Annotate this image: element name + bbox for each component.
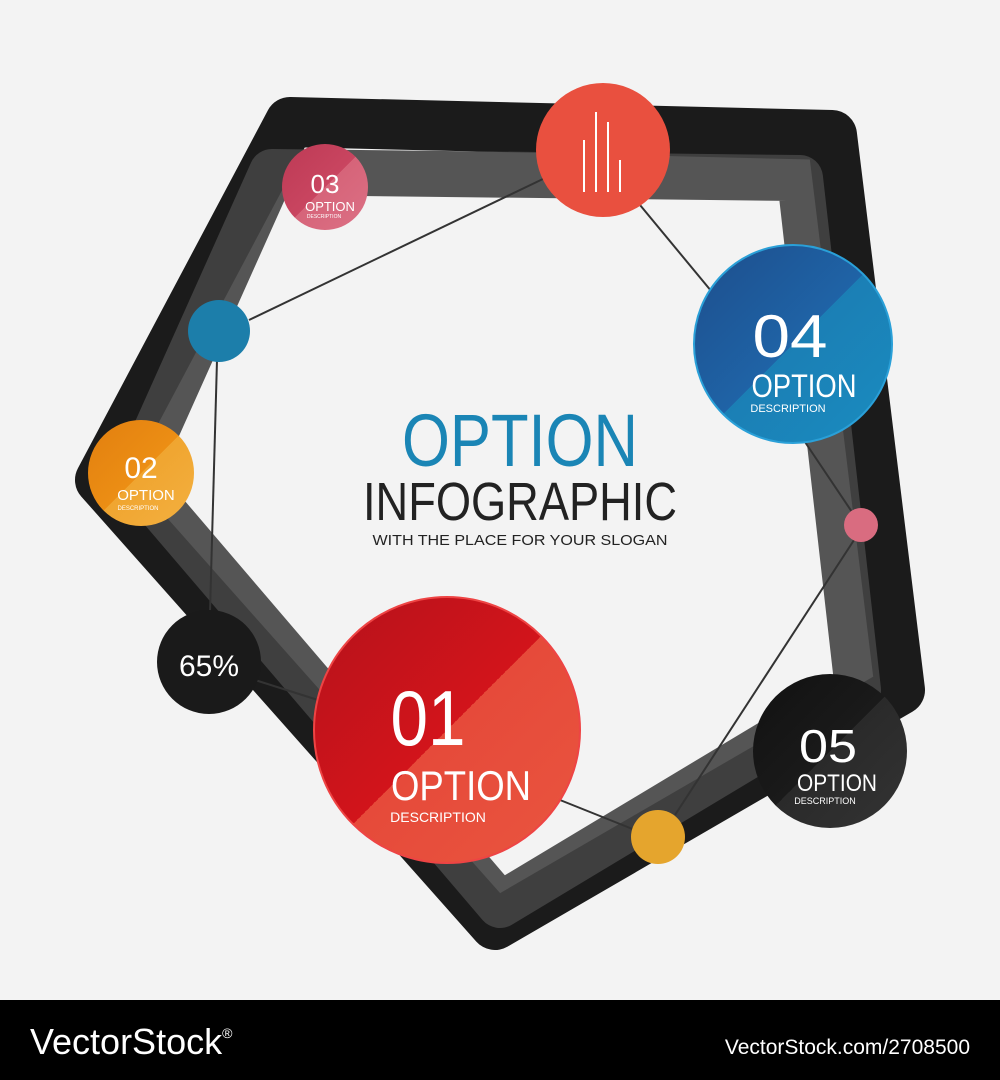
title: INFOGRAPHIC <box>363 472 677 532</box>
65% circle <box>157 610 261 714</box>
small pink dot <box>844 508 878 542</box>
option 05: 05 <box>799 720 857 772</box>
option 02: OPTION <box>117 487 175 504</box>
icon circle: chart top <box>536 83 670 217</box>
option 04: DESCRIPTION <box>750 403 826 415</box>
footer bar: VectorStock.com/2708500 <box>725 1036 970 1059</box>
option 04 <box>694 245 892 443</box>
option 01: DESCRIPTION <box>390 809 486 825</box>
option 03: DESCRIPTION <box>307 214 341 220</box>
small blue dot <box>188 300 250 362</box>
footer bar <box>0 1000 1000 1080</box>
connector lines <box>210 178 856 830</box>
option 02: DESCRIPTION <box>117 506 159 512</box>
option 02 <box>88 420 194 526</box>
title <box>363 399 677 549</box>
footer bar: VectorStock <box>30 1021 222 1062</box>
option 02: 02 <box>124 452 158 485</box>
option 05: OPTION <box>797 770 877 797</box>
option 03 <box>282 144 368 230</box>
option 01: OPTION <box>391 762 531 809</box>
option 05: DESCRIPTION <box>794 796 856 806</box>
option 04: 04 <box>752 303 828 370</box>
small yellow dot <box>631 810 685 864</box>
title: OPTION <box>402 399 638 482</box>
option 03: OPTION <box>305 199 355 214</box>
footer bar: ® <box>222 1025 233 1041</box>
option 01 <box>314 597 580 863</box>
option 03: 03 <box>311 169 339 199</box>
title: WITH THE PLACE FOR YOUR SLOGAN <box>372 532 668 549</box>
65% circle: 65% <box>179 650 239 683</box>
option 05 <box>753 674 907 828</box>
gray band <box>135 172 858 905</box>
option 01: 01 <box>390 674 466 762</box>
option 04: OPTION <box>752 368 856 404</box>
black band <box>100 122 900 925</box>
